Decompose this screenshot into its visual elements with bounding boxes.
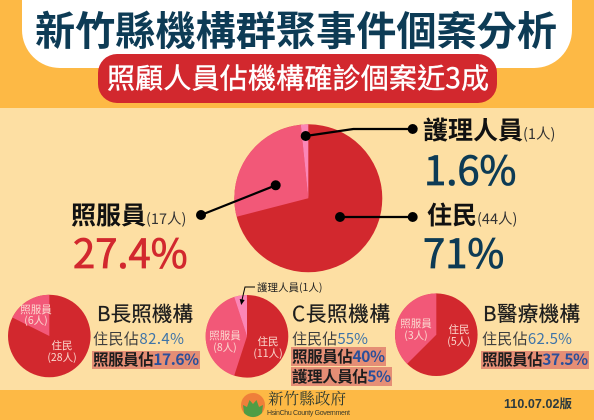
pie: C long-term care	[206, 295, 288, 378]
callout: nurses: 護理人員(1人)	[257, 280, 322, 295]
label: care workers 27.4%	[71, 196, 188, 280]
pie: C long-term care: 住民	[258, 334, 278, 349]
resident share: 住民佔55%	[292, 328, 368, 349]
resident share: 住民佔62.5%	[482, 328, 572, 349]
leader line: nurses	[301, 124, 418, 141]
leader line: residents	[335, 212, 418, 222]
pie: C long-term care: (11人)	[253, 346, 283, 361]
main pie chart	[234, 124, 382, 272]
panel: B medical institution	[395, 293, 589, 376]
content panel background	[0, 108, 594, 390]
pie: B long-term care: 住民	[52, 338, 72, 353]
county name in English: HsinChu County Government	[267, 410, 350, 417]
label: care workers 27.4%: 照服員(17人)	[71, 196, 186, 232]
pie: B long-term care	[8, 295, 91, 377]
pie: B long-term care: (6人)	[24, 313, 48, 328]
care worker share highlight: 照服員佔40%	[292, 345, 385, 367]
pie: B long-term care: (28人)	[47, 350, 77, 365]
heading: C long-term care: C長照機構	[292, 297, 390, 327]
label: nurses 1.6%	[423, 111, 555, 197]
header background	[0, 0, 594, 108]
icon: county emblem	[241, 393, 265, 417]
logo: Hsinchu County Government	[241, 387, 350, 417]
resident share: 住民佔82.4%	[93, 328, 184, 349]
heading: B long-term care: B長照機構	[97, 297, 193, 327]
panel: C long-term care	[206, 280, 392, 387]
label: residents 71%	[423, 196, 517, 280]
pie: B medical institution: (5人)	[447, 334, 471, 349]
title: 新竹縣機構群聚事件個案分析	[35, 0, 557, 57]
pie: B medical institution: 照服員	[400, 316, 432, 331]
nurse share highlight: 護理人員佔5%	[292, 365, 391, 387]
version date: 110.07.02版	[504, 397, 572, 411]
label: nurses 1.6%: 1.6%	[424, 139, 516, 197]
label: nurses 1.6%: 護理人員(1人)	[423, 111, 555, 147]
care worker share highlight: 照服員佔37.5%	[482, 348, 588, 370]
label: residents 71%: 住民(44人)	[427, 196, 517, 232]
pie: C long-term care: (8人)	[213, 340, 237, 355]
pie: B medical institution: 住民	[448, 322, 470, 337]
pie: B medical institution: (3人)	[404, 328, 428, 343]
care worker share highlight: 照服員佔17.6%	[93, 348, 199, 370]
callout: nurses	[240, 280, 322, 305]
county name: 新竹縣政府	[268, 387, 346, 409]
heading: B medical institution: B醫療機構	[483, 297, 580, 327]
pie: B long-term care: 照服員	[20, 302, 52, 317]
label: residents 71%: 71%	[423, 222, 504, 280]
pie: B medical institution	[395, 293, 478, 376]
footer background	[0, 390, 594, 420]
subtitle banner: 照顧人員佔機構確診個案近3成	[107, 57, 489, 97]
leader line: care workers	[196, 180, 281, 220]
pie: C long-term care: 照服員	[209, 328, 241, 343]
label: care workers 27.4%: 27.4%	[73, 222, 188, 280]
panel: B long-term care	[8, 295, 200, 377]
